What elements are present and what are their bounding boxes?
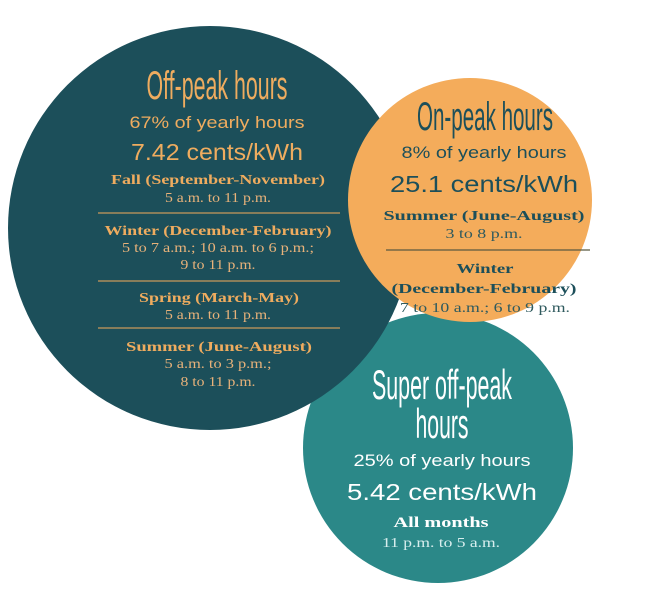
heading: off-peak hours: Off-peak hours [146,64,288,108]
text: winter: 9 to 11 p.m. [180,257,256,272]
text: winter [104,224,332,272]
text: winter: Winter (December-February) [104,224,332,239]
text: spring: Spring (March-May) [139,291,299,306]
text: on-peak share: 8% of yearly hours [402,143,566,162]
heading: super off-peak hours [372,361,513,447]
text: on-peak winter [392,262,577,315]
text: on-peak summer: Summer (June-August) [384,209,585,224]
text: on-peak winter: Winter [456,262,514,277]
text: on-peak summer [384,209,585,241]
text: all months: 11 p.m. to 5 a.m. [382,536,500,551]
panel: off-peak circle [8,26,412,430]
text: on-peak summer: 3 to 8 p.m. [446,226,522,241]
text: on-peak winter: 7 to 10 a.m.; 6 to 9 p.m. [400,300,570,315]
text: summer: Summer (June-August) [126,340,312,355]
text: winter: 5 to 7 a.m.; 10 a.m. to 6 p.m.; [122,240,314,255]
text: super price: 5.42 cents/kWh [347,479,537,505]
heading: super off-peak hours: Super off-peak [372,361,513,408]
heading: super off-peak hours: hours [416,400,468,447]
text: spring [139,291,299,322]
text: summer: 8 to 11 p.m. [180,374,256,389]
text: super share: 25% of yearly hours [354,451,530,470]
text: all months: All months [394,515,489,531]
panel: super off-peak circle [303,313,573,583]
text: off-peak price: 7.42 cents/kWh [131,139,303,165]
text: fall: 5 a.m. to 11 p.m. [165,190,271,205]
text: summer: 5 a.m. to 3 p.m.; [164,356,272,371]
text: all months [382,515,500,551]
text: on-peak price: 25.1 cents/kWh [390,171,578,197]
text: fall: Fall (September-November) [111,173,325,188]
text: fall [111,173,325,205]
text: summer [126,340,312,389]
text: spring: 5 a.m. to 11 p.m. [165,307,271,322]
text: on-peak winter: (December-February) [392,282,577,297]
panel: on-peak circle [348,78,592,322]
text: off-peak share: 67% of yearly hours [130,113,304,132]
